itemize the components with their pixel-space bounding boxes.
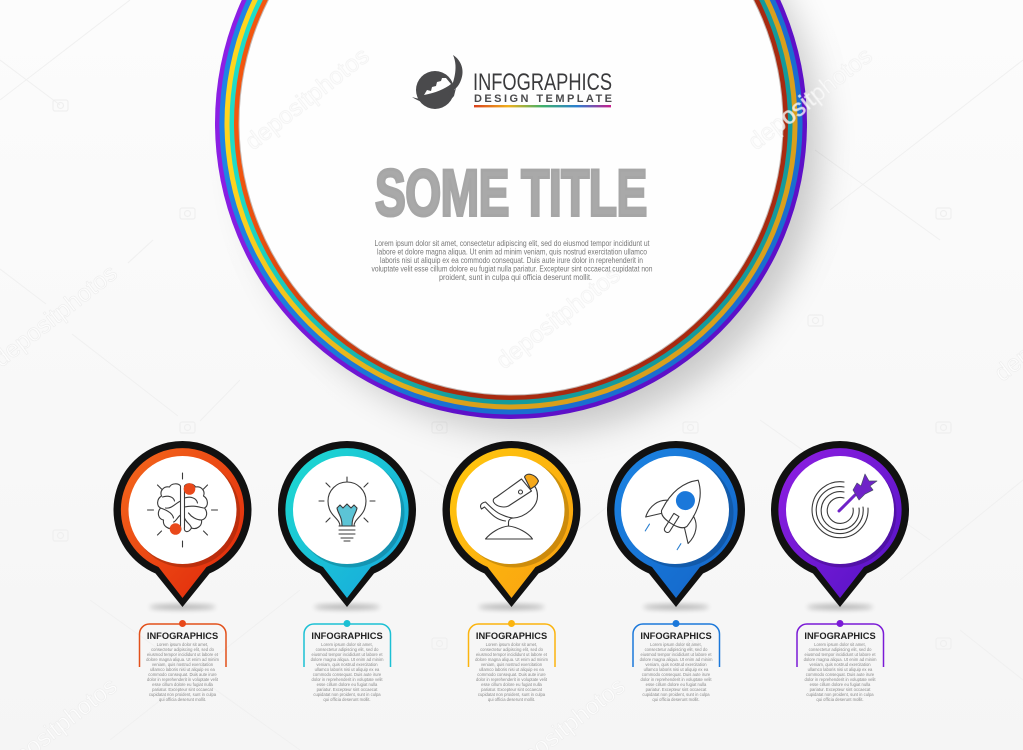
step 1 text box: Lorem ipsum dolor sit amet, — [157, 642, 208, 647]
step 2 text box: consectetur adipiscing elit, sed do — [316, 647, 379, 652]
step 3 text box: esse cillum dolore eu fugiat nulla — [481, 682, 543, 687]
icon: target with arrow — [812, 474, 877, 538]
step 4 text box — [633, 620, 720, 702]
step 3 text box: INFOGRAPHICS — [476, 631, 547, 641]
step 3 text box: Lorem ipsum dolor sit amet, — [486, 642, 537, 647]
step 3 text box: qui officia deserunt mollit. — [488, 697, 535, 702]
step 1 text box: pariatur. Excepteur sint occaecat — [152, 687, 214, 692]
step 5 text box: ullamco laboris nisi ut aliquip ex ea — [808, 667, 873, 672]
intro paragraph: voluptate velit esse cillum dolore eu fugiat nulla pariatur. Excepteur sint occaecat cupidatat non — [372, 264, 653, 274]
step 2 text box: dolore magna aliqua. Ut enim ad minim — [311, 657, 384, 662]
step 3 text box: cupidatat non proident, sunt in culpa — [478, 692, 546, 697]
title: SOME TITLE — [375, 156, 647, 231]
step 2 text box: INFOGRAPHICS — [311, 631, 383, 641]
logo mark — [412, 55, 463, 109]
step 1 text box: qui officia deserunt mollit. — [159, 697, 206, 702]
step 5 text box: Lorem ipsum dolor sit amet, — [814, 642, 866, 647]
step 4 text box: INFOGRAPHICS — [640, 631, 712, 641]
step 1 text box: veniam, quis nostrud exercitation — [152, 662, 214, 667]
step 2 text box: esse cillum dolore eu fugiat nulla — [317, 682, 378, 687]
step 2 text box: qui officia deserunt mollit. — [323, 697, 371, 702]
step 2 text box: dolor in reprehenderit in voluptate velit — [312, 677, 383, 682]
step 4 text box: commodo consequat. Duis aute irure — [642, 672, 711, 677]
step 5 text box: pariatur. Excepteur sint occaecat — [810, 687, 871, 692]
step 4 text box: eiusmod tempor incididunt ut labore et — [640, 652, 712, 657]
step 4 text box: cupidatat non proident, sunt in culpa — [642, 692, 710, 697]
step 5 text box: INFOGRAPHICS — [804, 631, 876, 641]
step 5 text box: cupidatat non proident, sunt in culpa — [806, 692, 874, 697]
step 5 text box: consectetur adipiscing elit, sed do — [809, 647, 872, 652]
intro paragraph — [372, 239, 653, 282]
intro paragraph: labore et dolore magna aliqua. Ut enim ad minim veniam, quis nostrud exercitation ullamco — [377, 248, 647, 256]
logo wordmark: INFOGRAPHICS — [473, 69, 612, 96]
step 3 text box: ullamco laboris nisi ut aliquip ex ea — [479, 667, 545, 672]
circle watermarks: depositphotos — [240, 42, 375, 156]
step 1 text box: esse cillum dolore eu fugiat nulla — [152, 682, 214, 687]
panel: large rainbow-ringed circle — [215, 0, 807, 419]
intro paragraph: Lorem ipsum dolor sit amet, consectetur adipiscing elit, sed do eiusmod tempor incididunt ut — [374, 239, 650, 248]
step 2 text box: cupidatat non proident, sunt in culpa — [313, 692, 381, 697]
step 2 text box — [304, 620, 390, 702]
step 2 text box: Lorem ipsum dolor sit amet, — [321, 642, 373, 647]
step 5 text box: qui officia deserunt mollit. — [816, 697, 864, 702]
step 2 text box: commodo consequat. Duis aute irure — [313, 672, 382, 677]
step 5 text box: eiusmod tempor incididunt ut labore et — [804, 652, 876, 657]
step 5 text box: dolore magna aliqua. Ut enim ad minim — [804, 657, 877, 662]
step 4 pin: rocket — [607, 441, 745, 610]
icon: brain — [148, 473, 218, 547]
step 3 text box: commodo consequat. Duis aute irure — [477, 672, 546, 677]
step 1 text box: ullamco laboris nisi ut aliquip ex ea — [150, 667, 216, 672]
step 1 text box: dolor in reprehenderit in voluptate velit — [147, 677, 219, 682]
circle watermarks — [240, 42, 878, 375]
step 2 text box: veniam, quis nostrud exercitation — [316, 662, 378, 667]
step 2 text box: eiusmod tempor incididunt ut labore et — [312, 652, 383, 657]
circle shadow — [244, 0, 820, 432]
step 1 text box: dolore magna aliqua. Ut enim ad minim — [146, 657, 219, 662]
step 2 text box: ullamco laboris nisi ut aliquip ex ea — [315, 667, 380, 672]
step 3 text box: pariatur. Excepteur sint occaecat — [481, 687, 543, 692]
step 4 text box: Lorem ipsum dolor sit amet, — [650, 642, 702, 647]
circle watermarks: depositphotos — [743, 42, 878, 156]
icon: microscope — [481, 474, 538, 539]
step 3 text box: consectetur adipiscing elit, sed do — [480, 647, 544, 652]
icon: rocket — [639, 466, 720, 554]
step 1 text box — [140, 620, 226, 702]
step 1 pin: brain — [113, 441, 252, 610]
step 3 text box — [468, 620, 555, 702]
step 1 text box: eiusmod tempor incididunt ut labore et — [147, 652, 219, 657]
step 4 text box: dolor in reprehenderit in voluptate velit — [640, 677, 712, 682]
step 4 text box: pariatur. Excepteur sint occaecat — [646, 687, 707, 692]
step 4 text box: qui officia deserunt mollit. — [652, 697, 700, 702]
logo tagline: DESIGN TEMPLATE — [474, 93, 612, 105]
icon: light bulb — [319, 477, 375, 541]
step 5 text box: dolor in reprehenderit in voluptate velit — [804, 677, 876, 682]
step 1 text box: cupidatat non proident, sunt in culpa — [149, 692, 217, 697]
step 4 text box: dolore magna aliqua. Ut enim ad minim — [640, 657, 713, 662]
step 4 text box: esse cillum dolore eu fugiat nulla — [646, 682, 707, 687]
step 3 text box: dolore magna aliqua. Ut enim ad minim — [475, 657, 548, 662]
step 4 text box: consectetur adipiscing elit, sed do — [645, 647, 708, 652]
step 5 text box: veniam, quis nostrud exercitation — [809, 662, 871, 667]
step 5 text box: esse cillum dolore eu fugiat nulla — [810, 682, 871, 687]
step 1 text box: consectetur adipiscing elit, sed do — [151, 647, 215, 652]
step 2 pin: light bulb — [278, 441, 416, 610]
step 3 text box: eiusmod tempor incididunt ut labore et — [476, 652, 548, 657]
logo rainbow underline — [474, 105, 611, 107]
intro paragraph: proident, sunt in culpa qui officia deserunt mollit. — [439, 273, 592, 282]
intro paragraph: laboris nisi ut aliquip ex ea commodo consequat. Duis aute irure dolor in reprehenderit in — [380, 256, 643, 265]
step 3 text box: veniam, quis nostrud exercitation — [481, 662, 543, 667]
step 5 text box: commodo consequat. Duis aute irure — [806, 672, 875, 677]
step 1 text box: INFOGRAPHICS — [147, 631, 218, 641]
step 5 text box — [797, 620, 884, 702]
step 5 pin: target — [771, 441, 909, 610]
step 3 text box: dolor in reprehenderit in voluptate velit — [476, 677, 548, 682]
step 4 text box: ullamco laboris nisi ut aliquip ex ea — [644, 667, 709, 672]
circle watermarks: depositphotos — [491, 261, 626, 375]
step 4 text box: veniam, quis nostrud exercitation — [645, 662, 707, 667]
step 2 text box: pariatur. Excepteur sint occaecat — [317, 687, 378, 692]
step 3 pin: microscope — [442, 441, 581, 610]
step 1 text box: commodo consequat. Duis aute irure — [148, 672, 217, 677]
logo — [412, 55, 612, 109]
